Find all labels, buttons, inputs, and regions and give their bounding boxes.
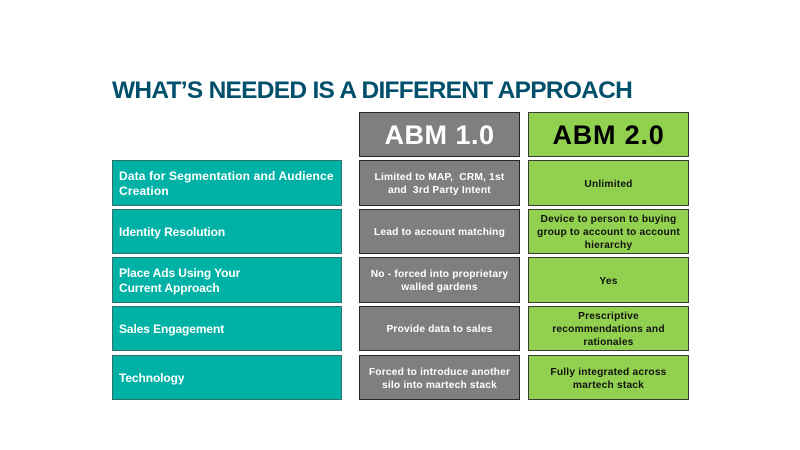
- ABM 1.0 cell: data: and 3rd Party Intent: [388, 185, 491, 196]
- row label: data for segmentation: Creation: [119, 184, 169, 198]
- ABM 2.0 cell: technology: martech stack: [573, 380, 644, 390]
- ABM 2.0 cell: identity: group to account to account: [537, 227, 680, 238]
- ABM 1.0 cell: identity: [359, 209, 520, 254]
- ABM 1.0 cell: sales: [359, 306, 520, 351]
- ABM 2.0 cell: place ads: [528, 257, 689, 303]
- ABM 1.0 cell: place ads: walled gardens: [401, 282, 478, 293]
- ABM 2.0 cell: data: Unlimited: [584, 178, 633, 190]
- ABM 2.0 cell: sales: recommendations and: [552, 324, 665, 335]
- row label: sales engagement: [112, 306, 342, 351]
- title: WHAT’S NEEDED IS A DIFFERENT APPROACH: [112, 77, 632, 104]
- ABM 1.0 cell: sales: Provide data to sales: [386, 324, 493, 335]
- ABM 2.0 cell: sales: [528, 306, 689, 351]
- ABM 1.0 cell: technology: [359, 355, 520, 400]
- row label: data for segmentation: Data for Segmentation and Audience: [119, 169, 334, 183]
- column header: ABM 2.0: ABM 2.0: [552, 120, 665, 150]
- row label: sales engagement: Sales Engagement: [119, 322, 224, 336]
- row label: identity resolution: Identity Resolution: [119, 225, 225, 239]
- row label: place ads: Place Ads Using Your: [119, 266, 240, 280]
- ABM 1.0 cell: technology: silo into martech stack: [382, 380, 497, 390]
- ABM 2.0 cell: place ads: Yes: [599, 276, 618, 286]
- ABM 2.0 cell: sales: rationales: [583, 337, 634, 348]
- ABM 2.0 cell: sales: Prescriptive: [578, 311, 639, 322]
- ABM 2.0 cell: technology: Fully integrated across: [550, 366, 667, 378]
- ABM 1.0 cell: place ads: No - forced into proprietary: [371, 269, 508, 280]
- ABM 2.0 cell: identity: [528, 209, 689, 254]
- row label: place ads: Current Approach: [119, 281, 220, 295]
- column header: ABM 1.0: ABM 1.0: [384, 120, 495, 150]
- ABM 2.0 cell: data: [528, 160, 689, 206]
- ABM 1.0 cell: identity: Lead to account matching: [374, 227, 505, 238]
- ABM 1.0 cell: data: Limited to MAP, CRM, 1st: [375, 172, 504, 183]
- ABM 1.0 cell: data: [359, 160, 520, 206]
- ABM 2.0 cell: identity: Device to person to buying: [541, 214, 676, 225]
- ABM 1.0 cell: technology: Forced to introduce another: [369, 366, 510, 378]
- row label: identity resolution: [112, 209, 342, 254]
- ABM 2.0 cell: technology: [528, 355, 689, 400]
- row label: data for segmentation: [112, 160, 342, 206]
- column header: ABM 1.0: [359, 112, 520, 157]
- row label: technology: [112, 355, 342, 400]
- row label: place ads: [112, 257, 342, 303]
- ABM 1.0 cell: place ads: [359, 257, 520, 303]
- column header: ABM 2.0: [528, 112, 689, 157]
- row label: technology: Technology: [119, 371, 184, 385]
- ABM 2.0 cell: identity: hierarchy: [585, 240, 632, 251]
